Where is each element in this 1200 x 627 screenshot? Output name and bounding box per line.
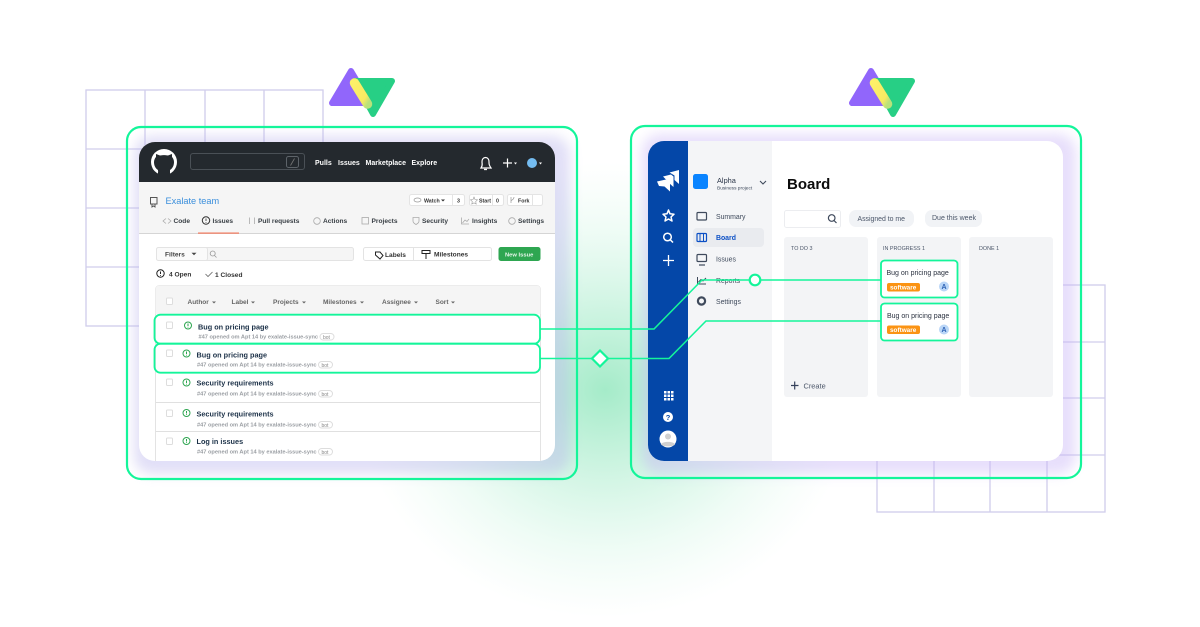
- column: in progress: [877, 237, 961, 397]
- repo tabs: Issues: [212, 218, 233, 225]
- issue row 3: #47 opened om Apt 14 by exalate-issue-sync: [197, 392, 317, 398]
- table header: Milestones: [323, 299, 357, 306]
- icon: plus dropdown: [503, 158, 517, 168]
- top nav links: Pulls: [315, 160, 332, 167]
- repo header: [139, 182, 555, 234]
- repo tabs: [174, 218, 544, 224]
- issues table: [156, 286, 540, 476]
- column: done: [969, 237, 1053, 397]
- issue row 5: #47 opened om Apt 14 by exalate-issue-sync: [197, 450, 317, 456]
- nav: settings: Settings: [716, 299, 741, 306]
- repo tabs: Pull requests: [258, 218, 300, 225]
- nav: settings: [698, 297, 741, 306]
- issue row 3: Security requirements: [196, 378, 274, 388]
- project sidebar: [688, 141, 772, 461]
- issue row 1: bot: [323, 335, 331, 341]
- repo tabs: Insights: [472, 218, 498, 225]
- filter bar: Filters: [165, 252, 185, 258]
- column: in progress: IN PROGRESS 1: [883, 246, 925, 252]
- star button: [470, 194, 504, 206]
- connector diamond node: [592, 350, 608, 366]
- repo tabs: Security: [422, 218, 448, 225]
- watch button: 3: [457, 198, 460, 204]
- icon: repo: [150, 198, 157, 207]
- connector circle node: [750, 275, 760, 285]
- board issue card 1: [881, 260, 958, 298]
- repo tabs: Settings: [518, 218, 544, 225]
- issue row 4: bot: [322, 423, 329, 429]
- icon: star: [663, 210, 674, 221]
- left background grid: [86, 90, 323, 326]
- labels and milestones buttons: Labels: [385, 252, 406, 259]
- issue row 4: Security requirements: [196, 410, 274, 418]
- labels and milestones buttons: Milestones: [434, 252, 468, 258]
- open and closed counts: 4 Open: [169, 272, 191, 278]
- column: to do: [784, 237, 868, 397]
- nav: issues: [697, 254, 736, 265]
- board issue card 2: Bug on pricing page: [887, 313, 949, 320]
- issue row 2: #47 opened om Apt 14 by exalate-issue-sync: [197, 362, 317, 368]
- column: done: DONE 1: [979, 246, 999, 252]
- nav: issues: Issues: [716, 256, 736, 264]
- icon: plus: [663, 255, 674, 266]
- issue row 2: Bug on pricing page: [196, 350, 267, 360]
- star button: 0: [496, 198, 499, 204]
- issue row 5: Log in issues: [196, 437, 243, 446]
- background glow: [355, 162, 855, 618]
- active tab underline: [198, 232, 239, 234]
- filter chip: due this week: Due this week: [932, 215, 976, 222]
- project header: [693, 174, 766, 192]
- issue row 3: bot: [322, 392, 329, 398]
- open and closed counts: 1 Closed: [215, 272, 242, 279]
- right card shadow: [642, 134, 1076, 474]
- issue row 3: [166, 378, 332, 398]
- icon: help: ?: [666, 413, 671, 422]
- board issue card 2: A: [941, 327, 947, 334]
- fork button: [508, 194, 542, 206]
- board issue card 1: software: [890, 284, 917, 292]
- search box: [190, 154, 304, 170]
- nav: reports: Reports: [716, 278, 741, 285]
- issue row 2: bot: [322, 363, 329, 369]
- issue row 2: [166, 350, 332, 369]
- new issue button: [498, 247, 540, 261]
- github top bar: [139, 142, 555, 182]
- table header: Author: [188, 299, 209, 306]
- table header: Sort: [436, 299, 449, 306]
- GitHub panel: [139, 142, 555, 476]
- table header: Projects: [273, 299, 299, 306]
- issue row 1: [166, 322, 334, 341]
- connector lines: [540, 280, 881, 358]
- column: to do: TO DO 3: [791, 246, 812, 252]
- search input: [784, 210, 840, 228]
- repo tabs: Actions: [323, 218, 348, 225]
- issue row highlight 1: [154, 315, 540, 344]
- board issue card 1: A: [941, 284, 947, 291]
- filter chip: assigned to me: [849, 210, 914, 227]
- watch button: Watch: [424, 198, 440, 204]
- left highlighted frame: [127, 127, 577, 479]
- right logo: [852, 71, 912, 114]
- nav: board: [697, 234, 736, 242]
- board issue card 1: Bug on pricing page: [886, 270, 949, 277]
- nav: reports: [698, 277, 741, 285]
- Jira panel: [648, 141, 1063, 461]
- board issue card 2: software: [890, 327, 917, 334]
- board heading: Board: [787, 176, 830, 193]
- right highlighted frame: [631, 126, 1081, 478]
- top nav links: Marketplace: [366, 160, 406, 167]
- filter bar: [156, 248, 354, 260]
- new issue button: New Issue: [505, 252, 534, 258]
- issue row 1: Bug on pricing page: [198, 322, 269, 332]
- nav: summary: [697, 212, 746, 221]
- labels and milestones buttons: [364, 248, 492, 260]
- open and closed counts: [157, 270, 242, 279]
- top nav links: [315, 160, 437, 167]
- fork button: Fork: [518, 198, 530, 204]
- repo tabs: Code: [174, 218, 190, 225]
- top nav links: Issues: [338, 160, 360, 167]
- icon: search: [664, 233, 673, 242]
- tab icons: [163, 217, 515, 224]
- icon: user avatar: [660, 430, 676, 448]
- icon: help: [663, 412, 673, 422]
- icon: jira logo: [657, 170, 679, 192]
- icon: apps grid: [664, 391, 674, 400]
- left card shadow: [134, 136, 570, 474]
- issue row 4: [166, 410, 332, 429]
- nav: summary: Summary: [716, 214, 746, 221]
- icon: bell: [481, 158, 491, 170]
- active nav highlight: [693, 228, 764, 247]
- issue row 1: #47 opened om Apt 14 by exalate-issue-sync: [198, 334, 318, 340]
- repo tabs: Projects: [372, 218, 398, 225]
- table header: [166, 298, 455, 306]
- table header: Assignee: [382, 299, 411, 306]
- filter chip: due this week: [925, 210, 982, 227]
- project header: Alpha: [717, 176, 737, 185]
- blue rail: [648, 141, 688, 461]
- board issue card 2: [881, 304, 958, 340]
- star button: Start: [479, 198, 491, 204]
- issue row 4: #47 opened om Apt 14 by exalate-issue-sync: [197, 422, 317, 428]
- left logo: [332, 71, 392, 114]
- icon: github logo: [151, 149, 177, 176]
- right background grid: [877, 285, 1105, 512]
- top nav links: Explore: [412, 160, 437, 167]
- filter chip: assigned to me: Assigned to me: [858, 216, 905, 223]
- column: to do: Create: [804, 382, 826, 390]
- issue row highlight 2: [154, 344, 540, 373]
- icon: avatar: [527, 158, 542, 168]
- project header: Business project: [717, 186, 753, 192]
- repo title: Exalate team: [166, 196, 219, 206]
- issue row 5: [166, 437, 332, 456]
- issue row 5: bot: [322, 450, 329, 456]
- table header: Label: [232, 299, 249, 306]
- nav: board: Board: [716, 235, 736, 242]
- watch button: [410, 194, 464, 206]
